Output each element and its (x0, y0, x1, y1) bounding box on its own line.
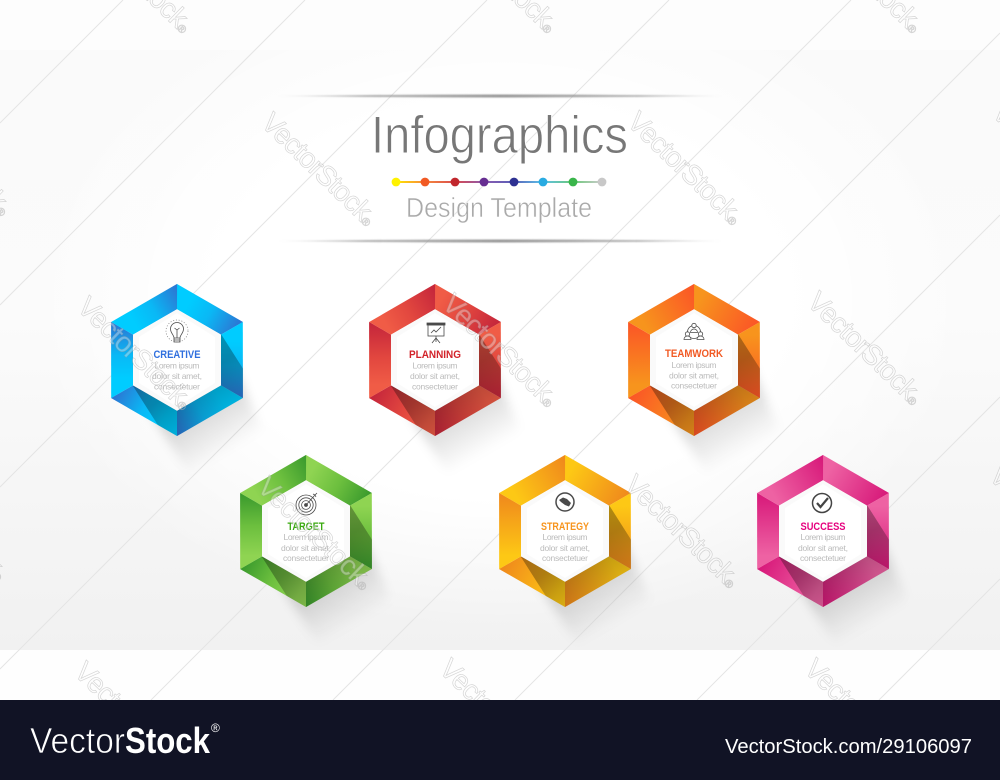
text: strategy description: consectetuer (542, 553, 588, 563)
label: teamwork: TEAMWORK (665, 348, 723, 360)
text: planning description: consectetuer (412, 382, 458, 392)
text: success description: Lorem ipsum (800, 532, 846, 542)
text: success description (798, 532, 848, 563)
watermarks: VectorStock® (252, 471, 380, 596)
top rule (278, 94, 722, 98)
label: success: SUCCESS (800, 521, 846, 533)
watermarks: VectorStock® (434, 653, 562, 778)
watermarks: VectorStock® (69, 656, 197, 780)
watermarks: VectorStock® (622, 106, 750, 231)
text: teamwork description: Lorem ipsum (672, 360, 716, 370)
watermarks: VectorStock® (72, 291, 200, 416)
footer bar (0, 700, 1000, 780)
watermarks: VectorStock® (799, 653, 927, 778)
text: strategy description: Lorem ipsum (542, 532, 588, 542)
text: creative description: consectetuer (154, 382, 200, 392)
panel: strategy hexagon (499, 454, 643, 632)
icon: presentation board (427, 323, 445, 343)
logo: VectorStock (30, 720, 220, 761)
icon: target (296, 493, 317, 515)
logo: VectorStock: ® (211, 721, 220, 735)
bottom rule (278, 240, 722, 242)
label: creative: CREATIVE (154, 349, 200, 361)
icon: strategy handshake (556, 493, 574, 511)
source url: VectorStock.com/29106097 (725, 736, 972, 758)
text: teamwork description: dolor sit amet, (669, 370, 719, 380)
text: target description: dolor sit amet, (281, 543, 331, 553)
logo: VectorStock: Stock (125, 720, 211, 761)
text: strategy description (540, 532, 590, 563)
text: teamwork description (669, 360, 719, 390)
text: creative description (152, 360, 202, 392)
text: target description (281, 532, 331, 563)
label: target: TARGET (288, 521, 325, 533)
logo: VectorStock: Vector (30, 720, 125, 761)
panel: success hexagon (757, 454, 901, 632)
text: teamwork description: consectetuer (671, 380, 717, 390)
watermarks: VectorStock® (619, 469, 747, 594)
text: creative description: dolor sit amet, (152, 371, 202, 381)
text: planning description (410, 360, 460, 392)
text: target description: Lorem ipsum (284, 532, 328, 542)
text: planning description: Lorem ipsum (412, 360, 458, 370)
heading: Infographics: Infographics (371, 106, 628, 165)
panel: planning hexagon (369, 284, 513, 462)
icon: light bulb (166, 320, 188, 342)
title block (278, 94, 722, 242)
dotted colour line (392, 178, 606, 186)
icon: team (684, 323, 704, 340)
panel: target hexagon (240, 455, 384, 632)
text: planning description: dolor sit amet, (410, 371, 460, 381)
text: success description: dolor sit amet, (798, 543, 848, 553)
label: strategy: STRATEGY (541, 521, 590, 533)
subtitle: Design Template: Design Template (406, 192, 592, 223)
watermarks: VectorStock® (802, 286, 930, 411)
watermarks: VectorStock® (256, 107, 384, 232)
icon: check mark (812, 494, 832, 512)
panel: teamwork hexagon (628, 284, 772, 462)
text: creative description: Lorem ipsum (154, 360, 200, 370)
text: strategy description: dolor sit amet, (540, 543, 590, 553)
watermarks: VectorStock® (437, 288, 565, 413)
panel: creative hexagon (111, 284, 255, 462)
label: planning: PLANNING (409, 349, 461, 361)
text: success description: consectetuer (800, 553, 846, 563)
text: target description: consectetuer (283, 553, 329, 563)
